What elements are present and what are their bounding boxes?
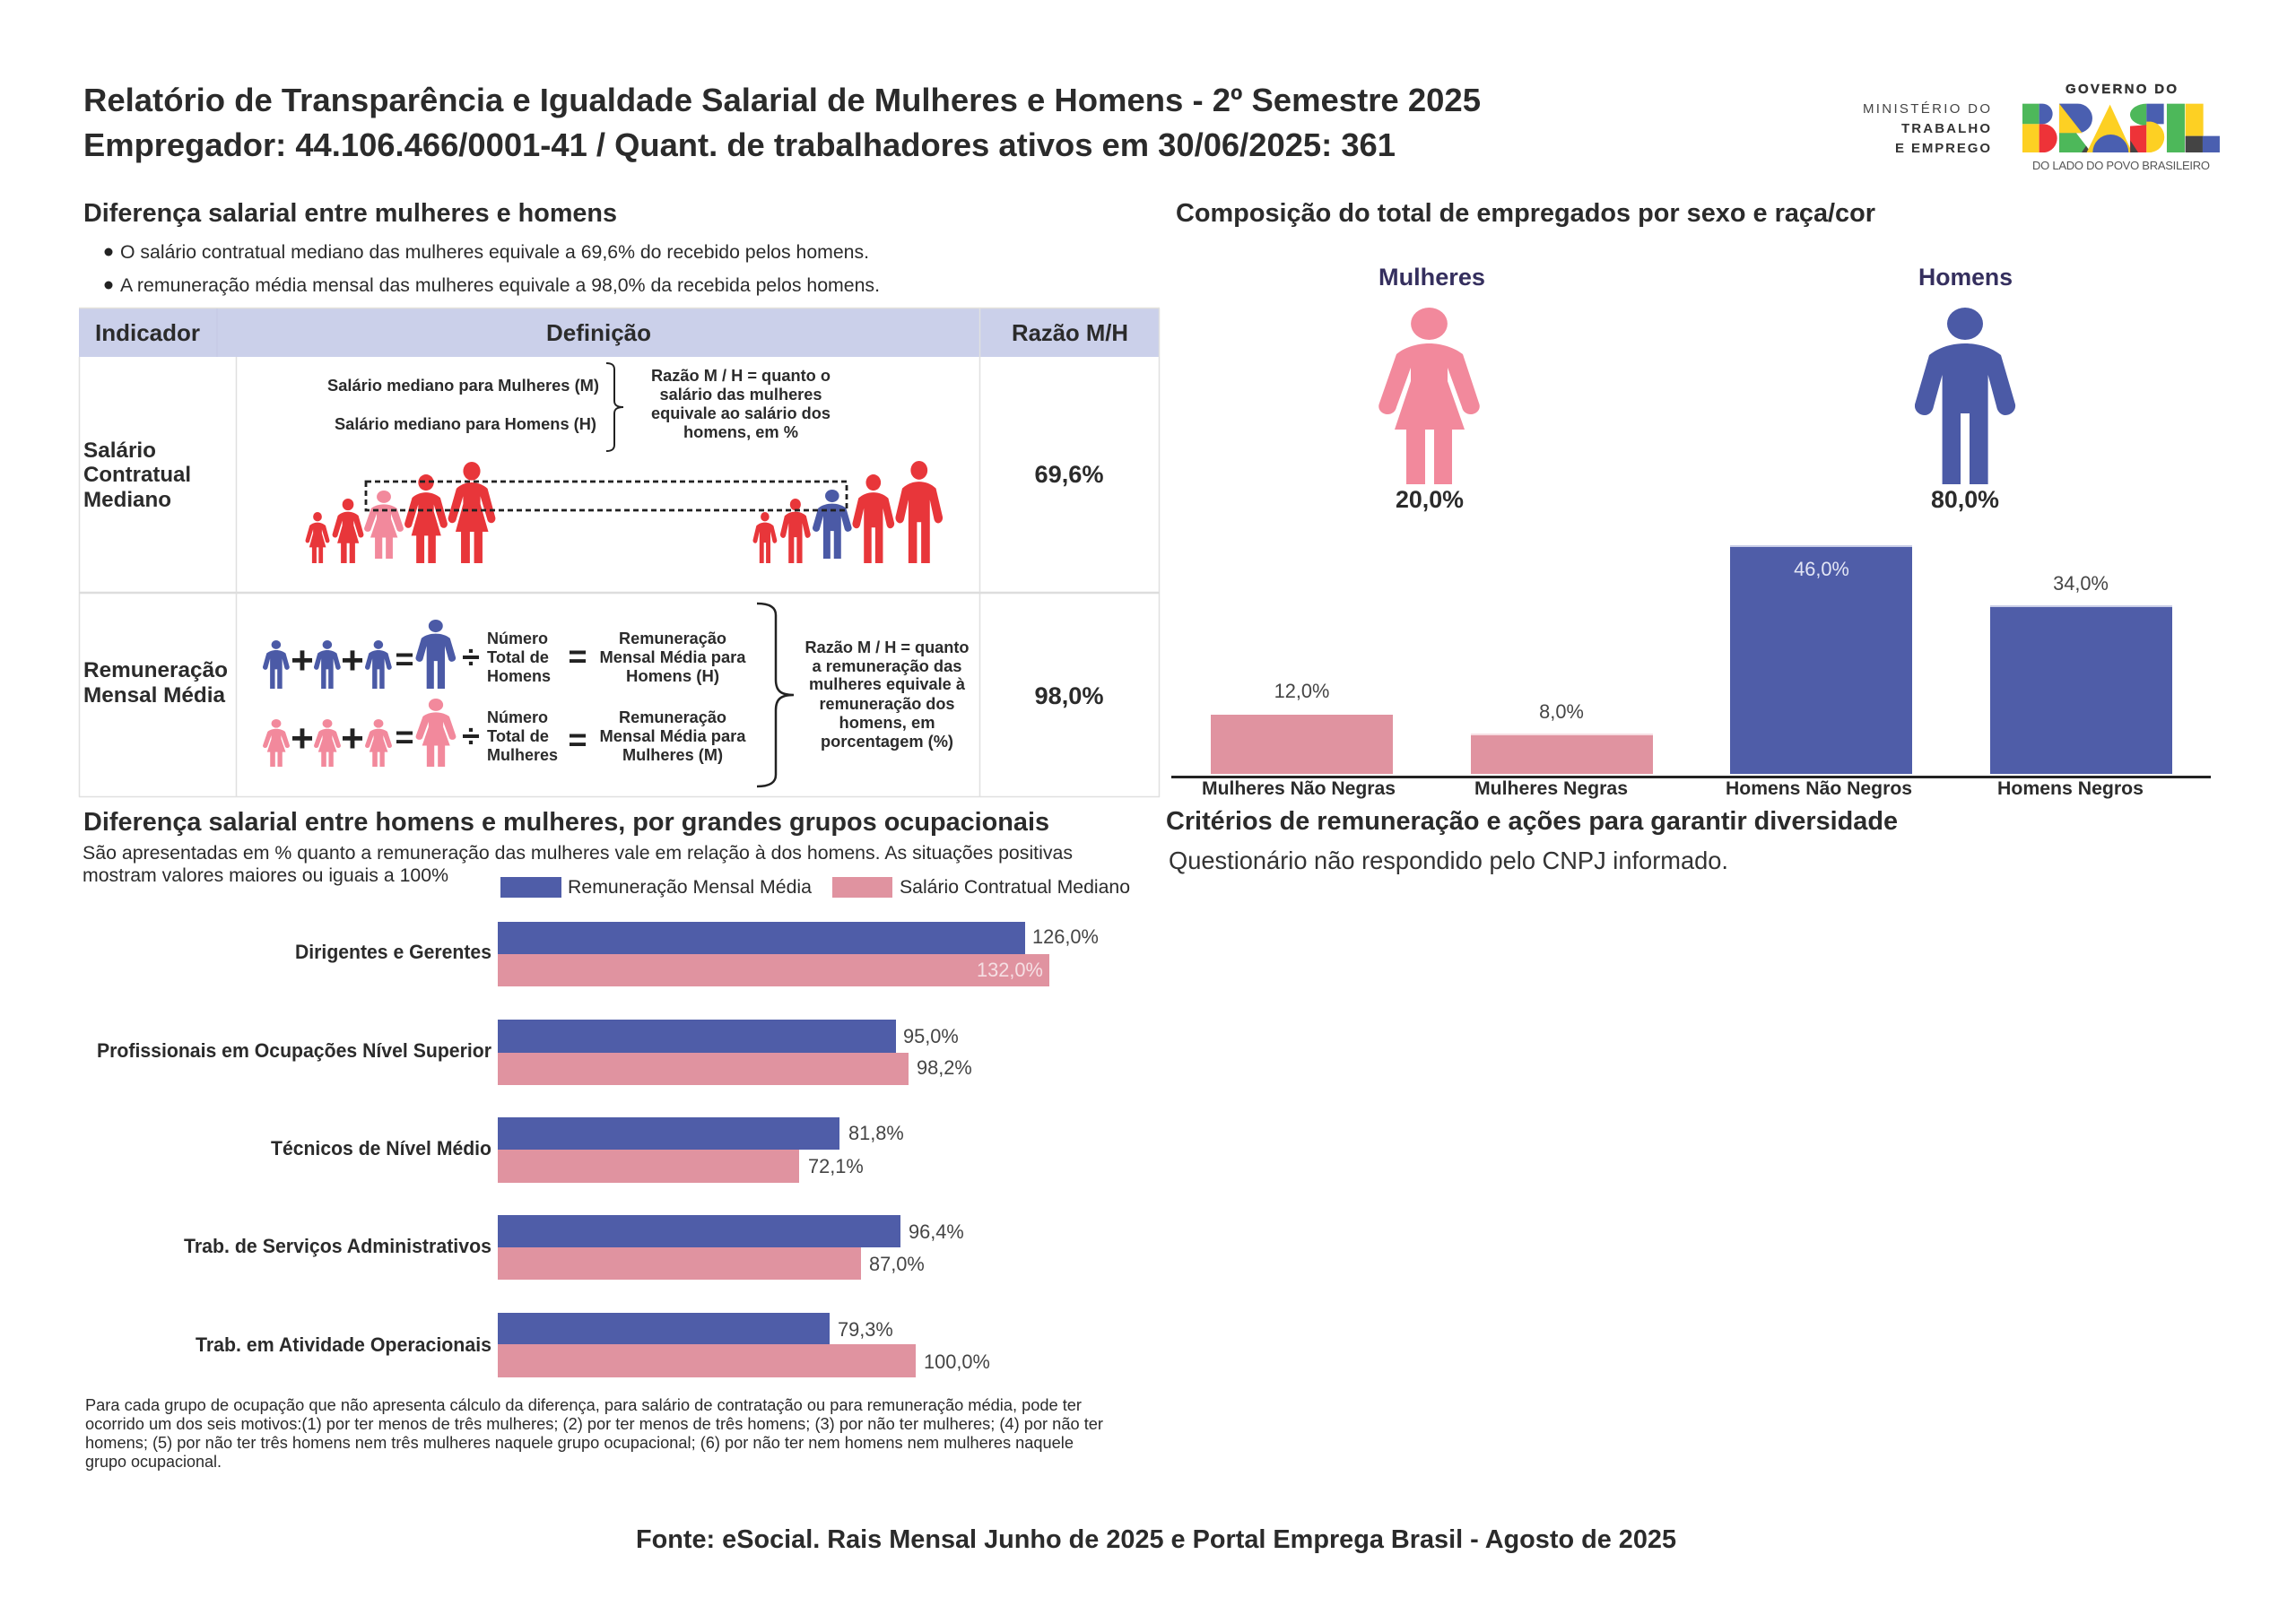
- panel: men share: Homens: [1918, 264, 2013, 291]
- legend: Salário Contratual Mediano: [900, 876, 1130, 898]
- subtitle: explicação: mostram valores maiores ou iguais a 100%: [83, 864, 448, 886]
- row label: Salário Contratual Mediano: Contratual: [83, 463, 191, 487]
- formula: women: [263, 699, 746, 767]
- definition text: razão remuneração: mulheres equivale à: [809, 674, 966, 693]
- row label: Remuneração Mensal Média: [83, 658, 228, 708]
- formula: men: =: [568, 638, 587, 674]
- formula: women: Mulheres: [487, 745, 558, 764]
- table header: [79, 308, 1160, 357]
- definition text: salário mediano: Salário mediano para Mulheres (M): [327, 376, 599, 395]
- definition text: razão remuneração: Razão M / H = quanto: [805, 638, 969, 656]
- value: razão remuneração: 98,0%: [1035, 682, 1103, 709]
- footnote: grupo ocupacional.: [85, 1453, 222, 1471]
- definition text: salário mediano: Salário mediano para Homens (H): [335, 414, 596, 433]
- formula: men: Total de: [487, 647, 549, 666]
- group: Técnicos: [271, 1117, 904, 1183]
- group: Técnicos: 81,8%: [848, 1122, 904, 1144]
- group: Profissionais: 95,0%: [903, 1025, 959, 1047]
- formula: women: +: [341, 716, 364, 760]
- column chart: sexo e raça: [1171, 545, 2211, 799]
- row label: Remuneração Mensal Média: Mensal Média: [83, 683, 225, 708]
- logo: Governo do Brasil: DO LADO DO POVO BRASILEIRO: [2032, 159, 2210, 172]
- group: Serviços Administrativos: 87,0%: [869, 1253, 925, 1275]
- formula: women: Remuneração: [619, 708, 726, 726]
- icons: men ordered by salary: [752, 461, 943, 563]
- brace: salário mediano: [606, 363, 623, 451]
- bar chart: grupos ocupacionais: [97, 922, 1099, 1377]
- group: Dirigentes e Gerentes: Dirigentes e Gerentes: [295, 941, 491, 963]
- column chart: sexo e raça: Homens Negros: [1997, 778, 2144, 799]
- formula: men: Remuneração: [619, 629, 726, 647]
- definition text: salário mediano: [327, 376, 599, 433]
- dashed median box: [366, 482, 847, 510]
- bullet list: A remuneração média mensal das mulheres equivale a 98,0% da recebida pelos homens.: [120, 274, 880, 296]
- column chart: sexo e raça: Mulheres Negras: [1474, 778, 1628, 799]
- table header: Definição: [546, 319, 651, 346]
- column chart: sexo e raça: Mulheres Não Negras: [1202, 778, 1396, 799]
- heading: Composição: Composição do total de empregados por sexo e raça/cor: [1176, 199, 1875, 228]
- formula: women: Mensal Média para: [599, 726, 746, 745]
- group: Atividade Operacionais: Trab. em Atividade Operacionais: [196, 1333, 491, 1356]
- row label: Salário Contratual Mediano: Mediano: [83, 488, 171, 512]
- table header: Razão M/H: [1012, 319, 1128, 346]
- group: Profissionais: [97, 1020, 972, 1085]
- formula: women: Mulheres (M): [622, 745, 723, 764]
- row label: Remuneração Mensal Média: Remuneração: [83, 658, 228, 682]
- row label: Salário Contratual Mediano: [83, 439, 191, 512]
- brace: remuneração: [757, 604, 794, 786]
- bullet list: [104, 240, 880, 296]
- group: Serviços Administrativos: Trab. de Serviços Administrativos: [184, 1235, 491, 1257]
- column chart: sexo e raça: 46,0%: [1794, 558, 1849, 580]
- group: Técnicos: 72,1%: [808, 1155, 864, 1177]
- formula: women: ÷: [462, 717, 480, 754]
- footnote: Para cada grupo de ocupação que não apresenta cálculo da diferença, para salário de contratação ou para remuneração média, pode ter: [85, 1396, 1082, 1414]
- formula: women: Total de: [487, 726, 549, 745]
- group: Atividade Operacionais: 79,3%: [838, 1318, 893, 1341]
- formula: men: Homens: [487, 666, 551, 685]
- logo: Ministério do Trabalho e Emprego: MINISTÉRIO DO: [1863, 101, 1990, 117]
- column chart: sexo e raça: 34,0%: [2053, 572, 2109, 595]
- logo: Governo do Brasil: GOVERNO DO: [2066, 82, 2177, 97]
- group: Dirigentes e Gerentes: 126,0%: [1032, 925, 1099, 948]
- title: Relatório de Transparência e Igualdade Salarial de Mulheres e Homens - 2º Semestre 2025: [83, 82, 1481, 118]
- definition text: razão salário: homens, em %: [683, 422, 798, 441]
- footnote: ocorrido um dos seis motivos:(1) por ter menos de três mulheres; (2) por ter menos de três homens; (3) por não ter mulheres; (4) por não ter: [85, 1415, 1103, 1433]
- definition text: razão salário: salário das mulheres: [660, 385, 822, 404]
- definition text: razão remuneração: homens, em: [839, 713, 935, 732]
- formula: women: Número: [487, 708, 548, 726]
- panel: women share: 20,0%: [1396, 486, 1464, 513]
- legend: Remuneração Mensal Média: [568, 876, 812, 898]
- logo: Ministério do Trabalho e Emprego: [1863, 101, 1990, 156]
- formula: men: ÷: [462, 638, 480, 675]
- panel: indicator table: [79, 308, 1160, 797]
- table header: Indicador: [95, 319, 200, 346]
- group: Profissionais: 98,2%: [917, 1056, 972, 1079]
- subtitle: explicação: [83, 841, 1073, 886]
- legend: [500, 876, 1130, 898]
- panel: men share: 80,0%: [1931, 486, 1999, 513]
- column chart: sexo e raça: Homens Não Negros: [1726, 778, 1912, 799]
- definition text: razão remuneração: remuneração dos: [820, 694, 954, 713]
- formula: men: +: [341, 638, 364, 682]
- logo: Governo do Brasil: [2022, 82, 2220, 172]
- panel: men share: [1915, 264, 2015, 513]
- definition text: razão salário: [651, 366, 831, 441]
- formula: men: [263, 620, 746, 689]
- definition text: razão salário: Razão M / H = quanto o: [651, 366, 831, 385]
- formula: women: +: [291, 716, 314, 760]
- heading: Diferença por grupos ocupacionais: Diferença salarial entre homens e mulheres, por grandes grupos ocupacionais: [83, 808, 1049, 837]
- formula: men: =: [395, 640, 414, 677]
- heading: Critérios: Critérios de remuneração e ações para garantir diversidade: [1166, 807, 1898, 836]
- group: Serviços Administrativos: [184, 1215, 964, 1280]
- subtitle: explicação: São apresentadas em % quanto a remuneração das mulheres vale em relação à dos homens. As situações positivas: [83, 841, 1073, 864]
- formula: men: Número: [487, 629, 548, 647]
- title: [83, 82, 1481, 163]
- panel: women share: Mulheres: [1378, 264, 1485, 291]
- logo: Ministério do Trabalho e Emprego: E EMPREGO: [1895, 141, 1990, 156]
- panel: women share: [1378, 264, 1485, 513]
- group: Profissionais: Profissionais em Ocupações Nível Superior: [97, 1039, 491, 1062]
- formula: women: =: [395, 718, 414, 755]
- group: Dirigentes e Gerentes: 132,0%: [977, 959, 1043, 981]
- definition text: razão salário: equivale ao salário dos: [651, 404, 831, 422]
- bullet list: O salário contratual mediano das mulheres equivale a 69,6% do recebido pelos homens.: [120, 240, 869, 263]
- row label: Salário Contratual Mediano: Salário: [83, 439, 156, 463]
- group: Dirigentes e Gerentes: [295, 922, 1099, 986]
- group: Atividade Operacionais: [196, 1313, 990, 1377]
- column chart: sexo e raça: 8,0%: [1539, 700, 1584, 723]
- source line: Fonte: eSocial. Rais Mensal Junho de 2025 e Portal Emprega Brasil - Agosto de 2025: [636, 1525, 1676, 1554]
- formula: men: +: [291, 638, 314, 682]
- definition text: razão remuneração: porcentagem (%): [821, 732, 953, 751]
- footnote: [85, 1396, 1103, 1471]
- group: Atividade Operacionais: 100,0%: [924, 1350, 990, 1373]
- formula: women: =: [568, 721, 587, 758]
- group: Serviços Administrativos: 96,4%: [909, 1220, 964, 1243]
- logo: Ministério do Trabalho e Emprego: TRABALHO: [1901, 121, 1990, 136]
- value: razão salário: 69,6%: [1035, 460, 1103, 488]
- title: Empregador: 44.106.466/0001-41 / Quant. de trabalhadores ativos em 30/06/2025: 361: [83, 126, 1396, 163]
- heading: Diferença salarial entre mulheres e homens: Diferença salarial entre mulheres e homens: [83, 199, 617, 228]
- icons: women ordered by salary: [306, 462, 495, 563]
- footnote: homens; (5) por não ter três homens nem três mulheres naquele grupo ocupacional; (6) por não ter nem homens nem mulheres naquele: [85, 1434, 1074, 1452]
- formula: men: Homens (H): [626, 666, 719, 685]
- group: Técnicos: Técnicos de Nível Médio: [271, 1137, 491, 1159]
- definition text: razão remuneração: a remuneração das: [813, 656, 961, 675]
- formula: men: Mensal Média para: [599, 647, 746, 666]
- column chart: sexo e raça: 12,0%: [1274, 680, 1329, 702]
- text: questionário: Questionário não respondido pelo CNPJ informado.: [1169, 847, 1728, 874]
- definition text: razão remuneração: [805, 638, 969, 751]
